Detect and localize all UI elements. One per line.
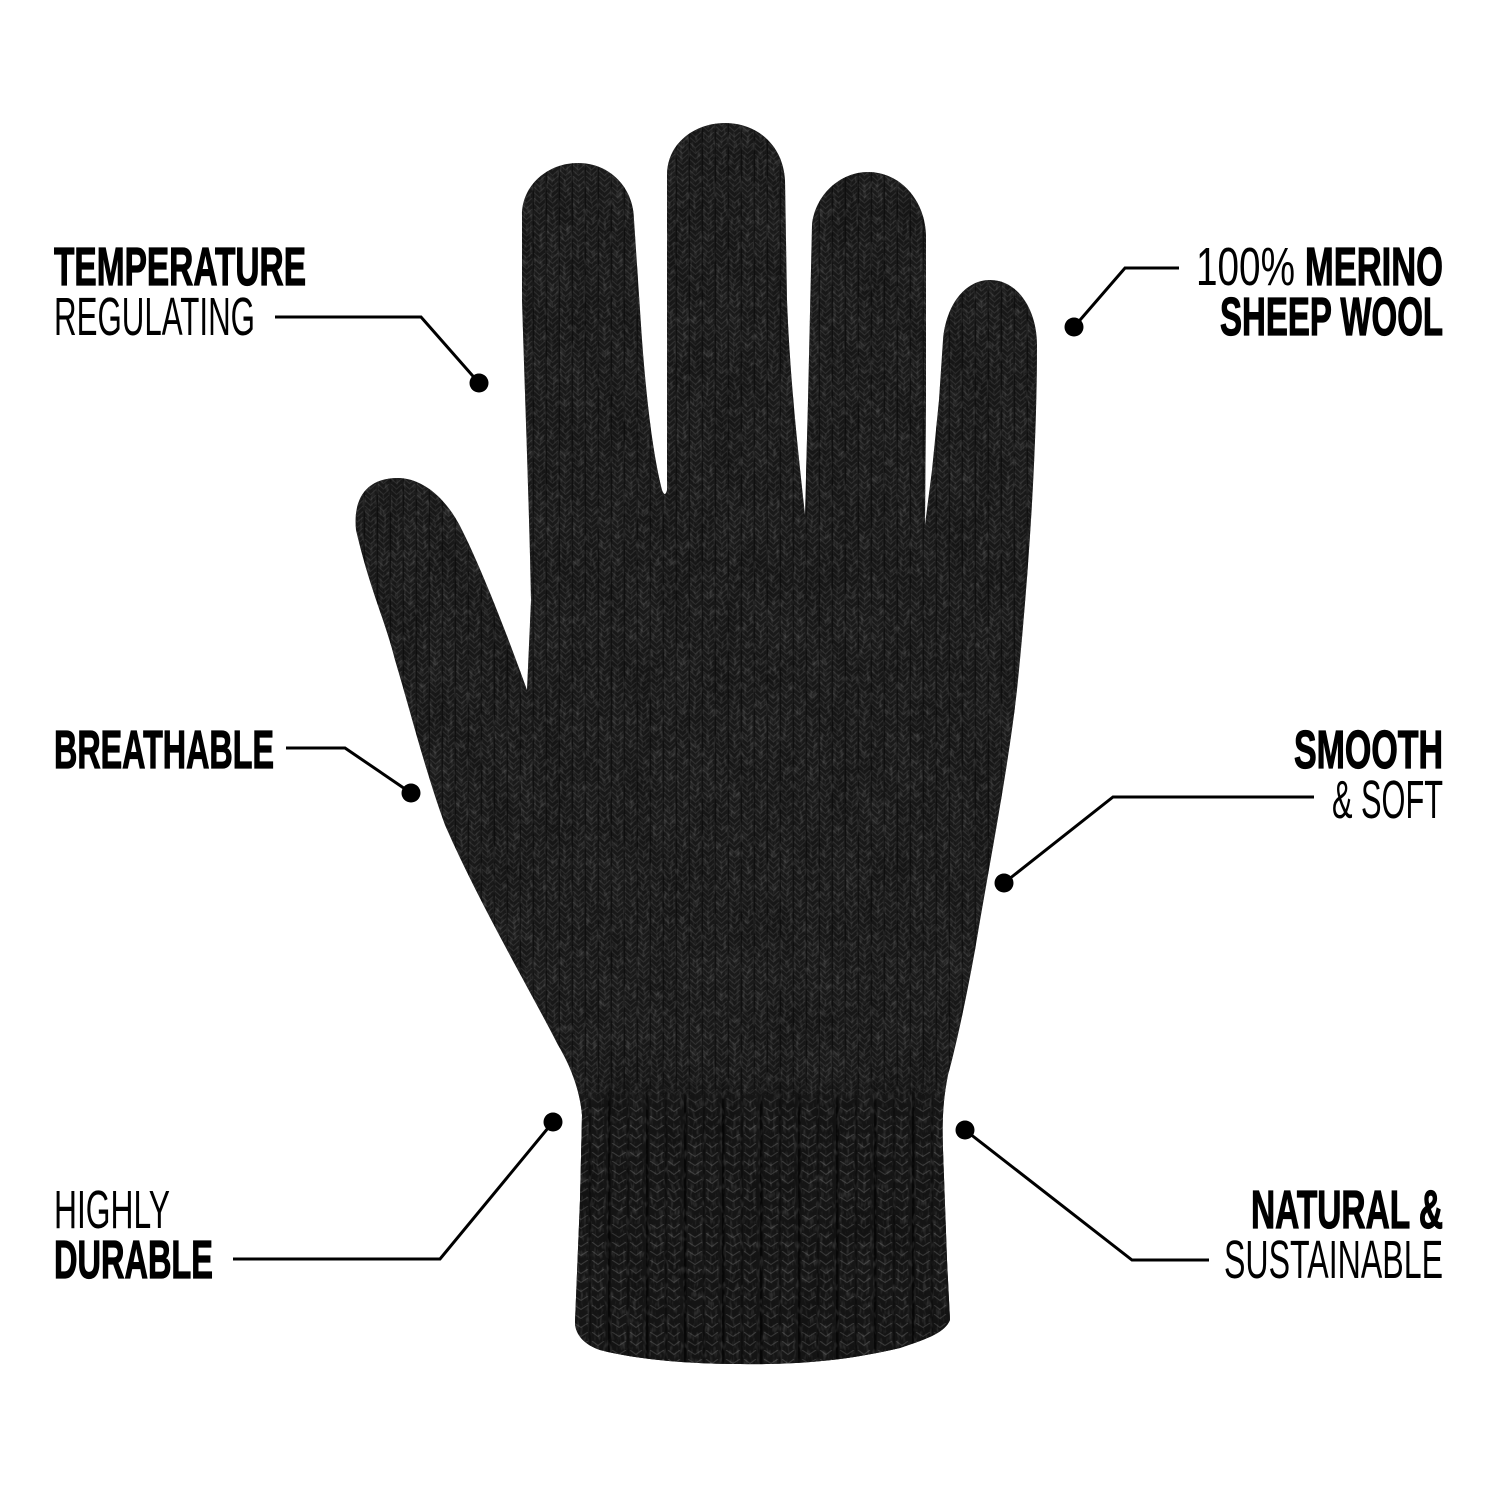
leader line: merino wool [1064, 268, 1179, 336]
label: smooth and soft [1294, 720, 1443, 830]
label: highly durable: HIGHLY [54, 1180, 170, 1240]
leader line: smooth and soft [994, 797, 1314, 892]
label: natural and sustainable [1224, 1180, 1443, 1290]
leader line: natural and sustainable [956, 1120, 1209, 1260]
label: breathable: BREATHABLE [54, 720, 274, 780]
label: merino wool: 100% [1196, 237, 1295, 297]
leader line: highly durable [233, 1112, 562, 1259]
label: merino wool [1196, 237, 1443, 347]
label: highly durable: DURABLE [54, 1230, 213, 1290]
label: temperature regulating: REGULATING [54, 287, 255, 347]
callout: 100% merino sheep wool [1064, 237, 1443, 347]
label: highly durable [54, 1180, 213, 1290]
leader line: breathable [286, 748, 420, 802]
callout: smooth and soft [994, 720, 1443, 892]
callout: temperature regulating [54, 237, 488, 392]
glove photo [340, 110, 1060, 1380]
callout: breathable [54, 720, 420, 802]
callout: natural and sustainable [956, 1120, 1443, 1290]
label: temperature regulating [54, 237, 306, 347]
callout: highly durable [54, 1112, 562, 1290]
leader line: temperature regulating [275, 317, 488, 392]
label: temperature regulating: TEMPERATURE [54, 237, 306, 297]
